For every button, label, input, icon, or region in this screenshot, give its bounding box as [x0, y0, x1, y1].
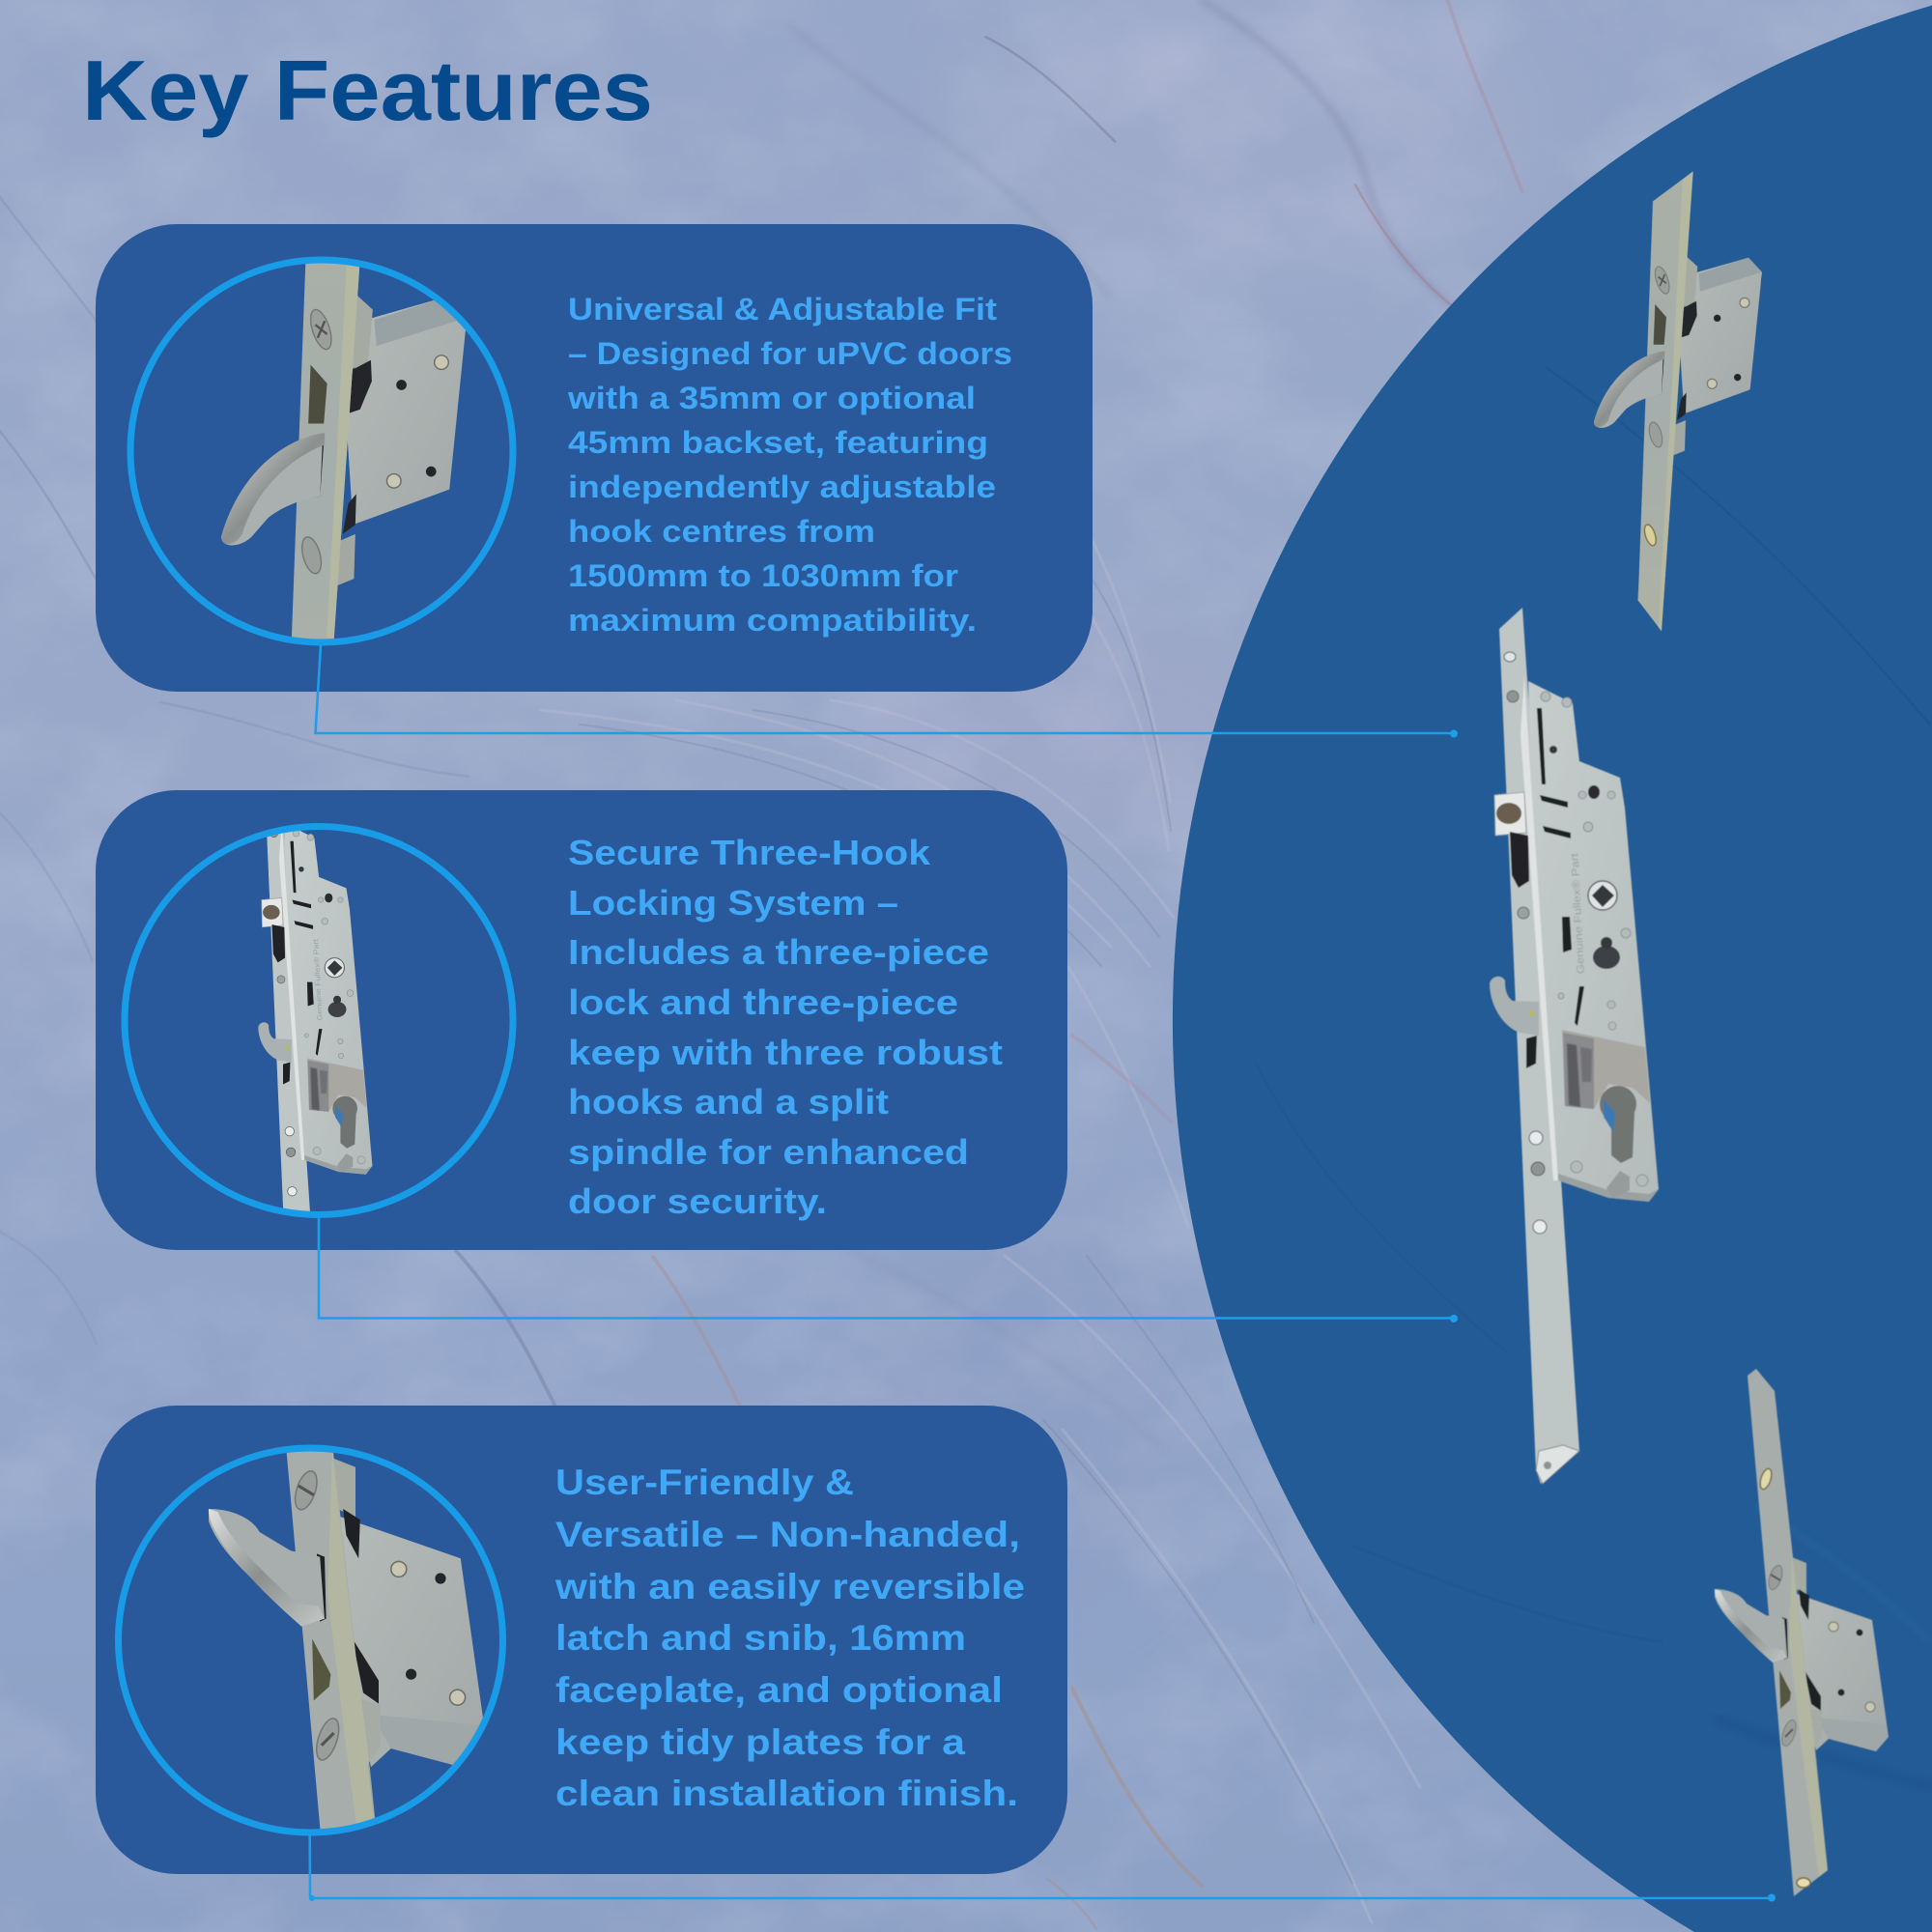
- feature text: maximum compatibility.: [568, 603, 977, 638]
- feature text: independently adjustable: [568, 469, 996, 504]
- feature text: clean installation finish.: [555, 1774, 1018, 1813]
- feature text: hooks and a split: [568, 1082, 889, 1122]
- feature text: keep tidy plates for a: [555, 1722, 965, 1762]
- feature text: User-Friendly &: [555, 1463, 854, 1502]
- circular lock close-up: [122, 823, 516, 1218]
- lock photo: bottom hook piece: [1715, 1369, 1889, 1896]
- panel: secure three-hook locking system: [96, 790, 1067, 1250]
- panel background: [96, 790, 1067, 1250]
- connector: panel two to lock: [319, 1218, 1458, 1322]
- feature text: lock and three-piece: [568, 982, 958, 1022]
- circular lock close-up: [115, 1445, 506, 1835]
- panel: user-friendly and versatile: [96, 1406, 1067, 1874]
- feature text: door security.: [568, 1181, 827, 1221]
- circular lock close-up: [130, 170, 513, 842]
- feature text: Versatile – Non-handed,: [555, 1515, 1020, 1554]
- feature text: Locking System –: [568, 883, 898, 923]
- large blue arc panel: [1173, 6, 1932, 1932]
- feature text: Secure Three-Hook: [568, 833, 931, 872]
- feature text: 45mm backset, featuring: [568, 425, 988, 460]
- feature text: Includes a three-piece: [568, 932, 989, 972]
- title: Key Features: [82, 43, 653, 138]
- feature text: hook centres from: [568, 514, 875, 549]
- feature text: [567, 292, 1012, 638]
- feature text: with an easily reversible: [554, 1567, 1025, 1606]
- lock photo: top hook piece: [1594, 171, 1762, 631]
- panel background: [96, 224, 1093, 692]
- feature text: 1500mm to 1030mm for: [568, 558, 958, 593]
- connector: panel one to lock: [315, 645, 1458, 738]
- panel: universal and adjustable fit: [96, 224, 1093, 692]
- lock photo: central three-hook lock: [1490, 608, 1659, 1484]
- feature text: Universal & Adjustable Fit: [568, 292, 997, 327]
- connector: panel three to lock: [309, 1835, 1776, 1901]
- feature text: keep with three robust: [568, 1033, 1003, 1072]
- feature text: latch and snib, 16mm: [555, 1618, 966, 1658]
- feature text: [568, 833, 1003, 1221]
- feature text: – Designed for uPVC doors: [568, 336, 1012, 371]
- feature text: with a 35mm or optional: [567, 381, 976, 415]
- feature text: faceplate, and optional: [555, 1670, 1003, 1710]
- panel background: [96, 1406, 1067, 1874]
- feature text: [554, 1463, 1025, 1813]
- feature text: spindle for enhanced: [568, 1132, 969, 1172]
